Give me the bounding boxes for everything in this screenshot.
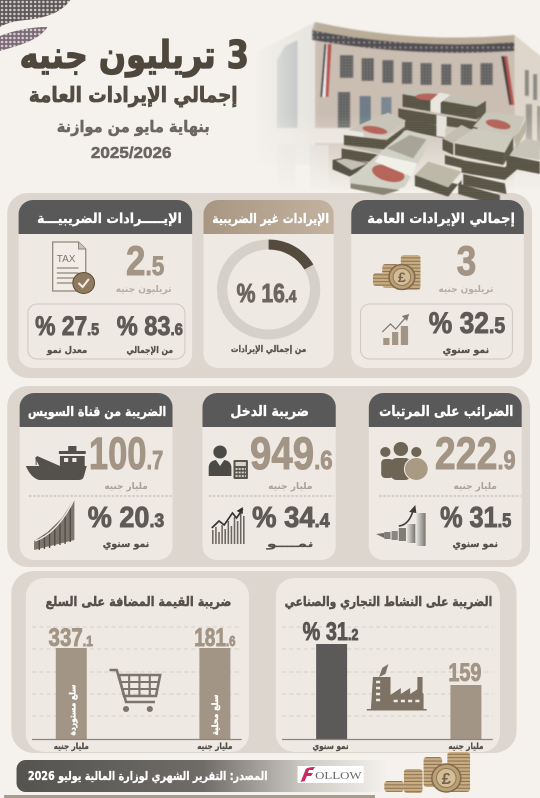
subtitle line: end of May: بنهاية مايو من موازنة [57,117,210,136]
icon: steep growth chart [34,499,74,550]
subtitle: إجمالي الإيرادات العامة [29,83,238,108]
logo [298,766,364,783]
icon: coins: £ [398,270,406,286]
value: 83.6%: % 83.6 [117,310,183,341]
label: نمو سنوي [103,539,149,550]
icon: tax document: TAX [57,253,75,265]
bar chart [32,648,242,740]
subtitle line: fiscal year: 2025/2026 [91,145,172,162]
label: of total: من الإجمالي [127,346,173,356]
panel background: taxes [7,386,530,567]
heading: الضريبة من قناة السويس [28,405,166,420]
label: yearly growth: نمو سنوي [443,345,489,356]
value: 27.5%: % 27.5 [35,310,100,341]
value: 337.1: 337.1 [49,624,93,652]
icon: market chart [212,507,244,544]
axis label: billion pounds: مليار جنيه [448,742,483,752]
panel: total revenue [351,200,524,368]
icon: rising bars [376,505,426,546]
heading: الضريبة على النشاط التجاري والصناعي [285,595,492,610]
icon: tax document [53,242,95,294]
center bundles [350,130,462,197]
money stacks [333,88,540,206]
growth box [361,304,512,359]
left pile [333,113,406,177]
value: 20.3%: % 20.3 [88,501,165,534]
heading: ضريبة القيمة المضافة على السلع [45,595,231,610]
value: 949.6: 949.6 [250,429,333,479]
panel: income tax [202,393,336,560]
icon: factory [367,664,427,710]
bar label: local goods: سلع محلية [211,694,221,736]
footer bar [4,752,470,798]
axis label: billion pounds: مليار جنيه [54,742,89,752]
corner mesh decoration [0,0,70,51]
value: 222.9: 222.9 [435,429,516,479]
heading: الإيـــــرادات الضريبيـــة [37,211,182,227]
icon: coins [384,752,470,793]
right pile [443,112,540,206]
value: 159: 159 [448,659,481,687]
panel background: revenues [7,193,532,378]
value: 2.5: 2.5 [126,238,164,285]
heading: إجمالي الإيرادات العامة [367,211,515,227]
value: 31.2%: % 31.2 [303,618,358,646]
bundle layers: top pile [398,88,486,138]
icon: coins [373,255,420,290]
panel: non-tax revenue [204,200,334,368]
label: من إجمالي الإيرادات [231,345,306,355]
panel: tax revenue [19,200,192,368]
heading: الإيرادات غير الضريبية [212,212,329,227]
icon: shopping cart [110,670,160,712]
unit: مليار جنيه [454,481,497,492]
bar chart [282,644,493,740]
title: 3 تريليون جنيه [20,34,249,78]
unit: مليار جنيه [104,481,148,492]
value: 31.5%: % 31.5 [440,501,512,534]
label: نمو سنوي [452,539,498,550]
icon: ship [26,446,87,480]
panel background: charts [11,571,517,753]
value: 32.5%: % 32.5 [429,306,505,340]
label: growth rate: معدل نمو [46,346,87,356]
label: نمــــو [266,539,314,550]
panel: commercial and industrial tax [276,578,500,752]
value: 181.6: 181.6 [194,624,236,652]
axis label: yearly growth: نمو سنوي [313,742,349,752]
value: 100.7: 100.7 [89,429,163,479]
panel: Suez Canal tax [20,393,173,560]
donut chart [222,244,315,334]
value: 3: 3 [457,238,476,285]
icon: coins: £ [442,770,451,788]
heading: ضريبة الدخل [230,403,309,420]
axis label: billion pounds: مليار جنيه [197,742,232,752]
icon: businessman with calculator [209,446,248,479]
unit: تريليون جنيه [116,284,171,295]
panel: VAT on goods [26,578,249,752]
bar label: imported goods: سلع مستوردة [68,684,78,736]
panel: salaries tax [369,393,522,560]
building photo [246,20,540,195]
stats box [28,304,185,359]
icon: people [380,442,428,480]
source text: المصدر: التقرير الشهري لوزارة المالية يوليو 2026 [28,769,268,783]
value: 16.4%: % 16.4 [237,278,297,308]
value: 34.4%: % 34.4 [252,501,330,534]
unit: مليار جنيه [268,481,313,492]
logo: OLLOW [315,770,362,782]
icon: growth chart [382,314,409,345]
unit: تريليون جنيه [439,284,493,295]
